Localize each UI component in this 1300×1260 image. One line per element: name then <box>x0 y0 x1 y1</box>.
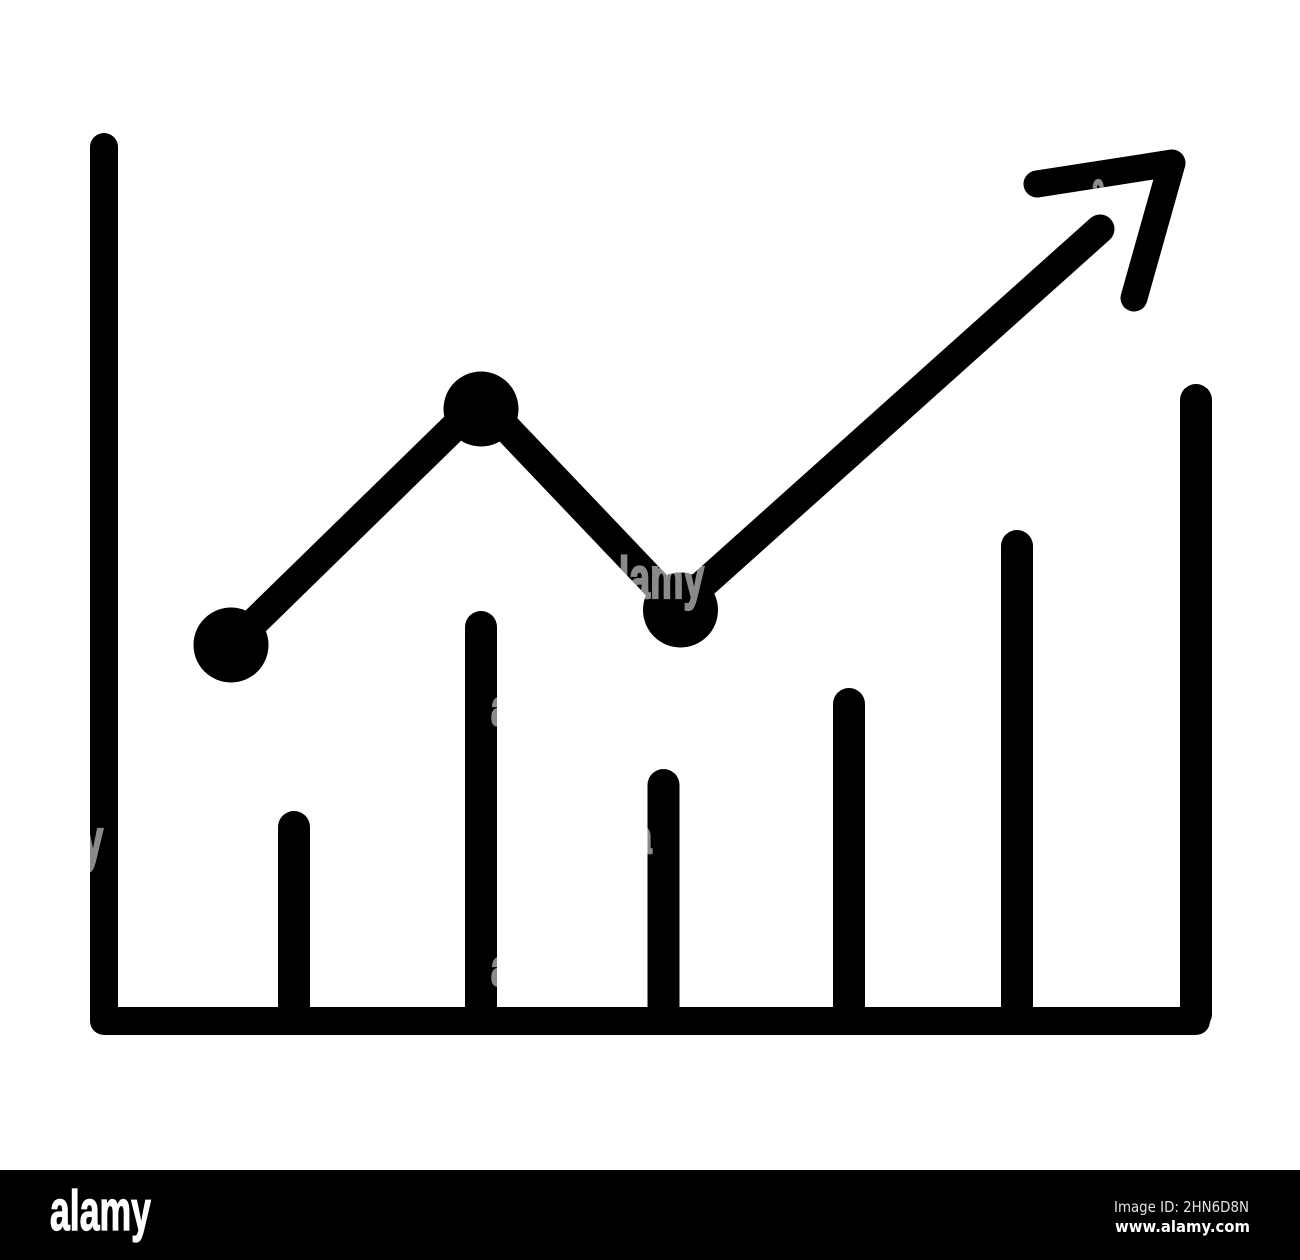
watermark fragments visible over the icon: alamy <box>598 547 704 611</box>
watermark fragments visible over the icon: a <box>636 812 652 864</box>
data point 3 <box>643 572 718 648</box>
bar 2 <box>465 627 497 1015</box>
image id: Image ID: 2HN6D8N <box>1114 1198 1249 1216</box>
website url: www.alamy.com <box>1115 1217 1250 1236</box>
arrowhead <box>1037 163 1172 298</box>
data point 2 <box>444 372 518 446</box>
bar 6 <box>1180 400 1212 1014</box>
watermark fragments visible over the icon: alamy <box>0 809 103 873</box>
bar 3 <box>648 785 680 1015</box>
footer band <box>0 1170 1300 1260</box>
data point 1 <box>194 608 268 682</box>
bar 5 <box>1001 546 1033 1015</box>
watermark fragments visible over the icon: a <box>491 679 509 736</box>
watermark fragments visible over the icon: a <box>491 939 509 996</box>
logo: alamy: alamy <box>50 1179 151 1243</box>
watermark fragments visible over the icon: a <box>1092 163 1105 215</box>
watermark fragments visible over the icon <box>90 178 1104 987</box>
trend line <box>231 229 1100 645</box>
chart icon: axes, bars, trend line and arrow <box>104 147 1196 1021</box>
axes <box>104 147 1196 1021</box>
bar 4 <box>833 704 865 1015</box>
bar 1 <box>278 827 310 1015</box>
